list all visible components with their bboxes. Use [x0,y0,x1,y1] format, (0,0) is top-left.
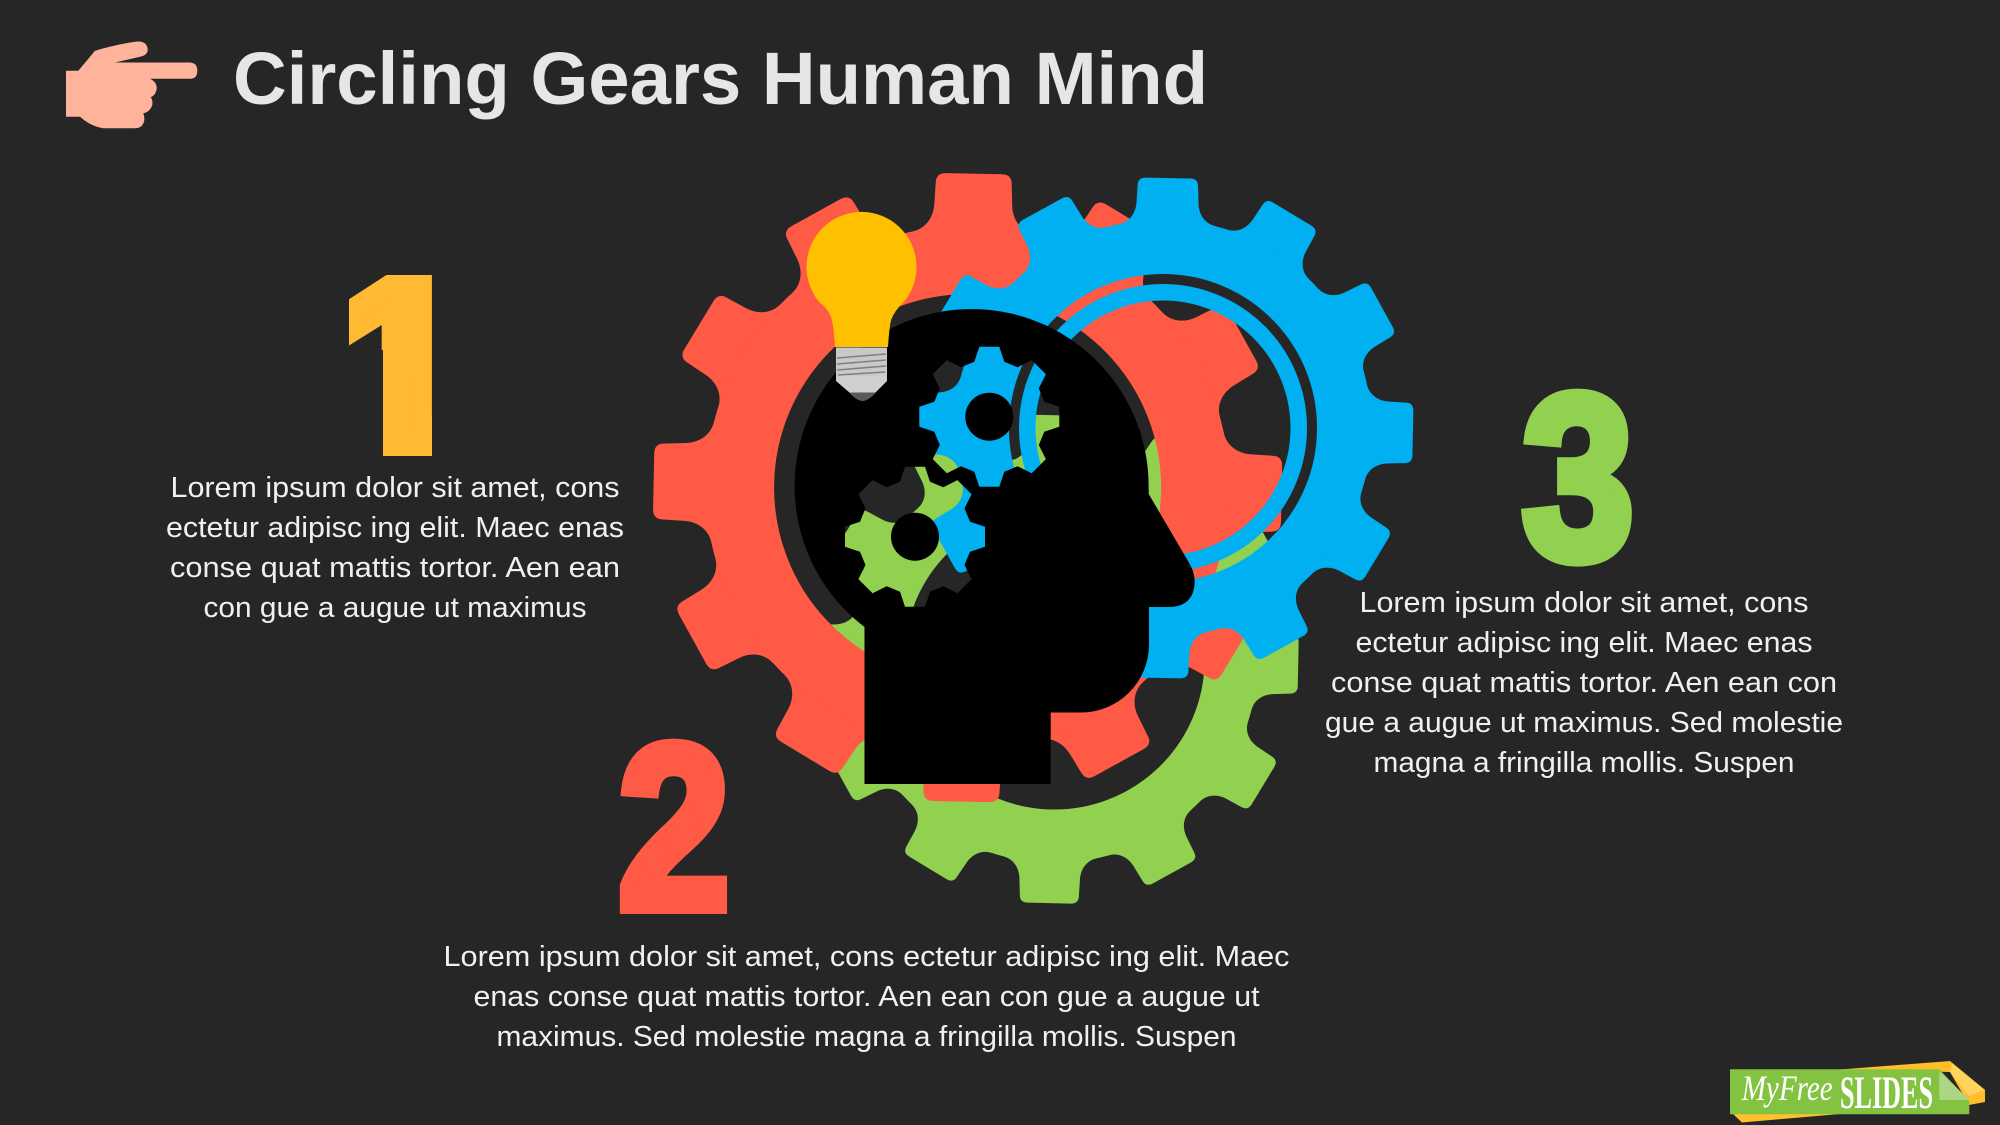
red gear [647,167,1288,808]
text block 1: con gue a augue ut maximus [204,592,586,624]
text block 3: Lorem ipsum dolor sit amet, cons [1360,587,1808,619]
text block 1: Lorem ipsum dolor sit amet, cons [170,472,620,504]
central gears and head illustration [647,167,1418,908]
text block 2: enas conse quat mattis tortor. Aen ean con gue a augue ut [474,981,1260,1013]
title: Circling Gears Human Mind [233,37,1208,120]
text block 2: maximus. Sed molestie magna a fringilla mollis. Suspen [496,1021,1236,1053]
icon: light bulb [806,212,916,401]
text block 3: gue a augue ut maximus. Sed molestie [1325,707,1843,739]
icon: pointing hand [66,41,197,128]
number 1: 1 [334,230,468,500]
logo: MyFree Slides [1730,1061,1985,1122]
head silhouette with gear cutouts [795,309,1195,784]
green gear [805,410,1303,908]
text block 2: Lorem ipsum dolor sit amet, cons ectetur adipisc ing elit. Maec [444,941,1290,973]
logo: MyFree Slides: MyFree [1741,1068,1833,1108]
text block 2 [444,941,1290,1053]
text block 3 [1325,587,1843,779]
text block 1 [166,472,624,624]
blue gear [908,173,1418,683]
text block 1: ectetur adipisc ing elit. Maec enas [166,512,624,544]
number 2: 2 [618,697,730,958]
text block 1: conse quat mattis tortor. Aen ean [170,552,620,584]
blue gear inner ring [1027,292,1299,564]
text block 3: magna a fringilla mollis. Suspen [1374,747,1794,779]
number 3: 3 [1522,347,1634,608]
text block 3: conse quat mattis tortor. Aen ean con [1331,667,1837,699]
text block 3: ectetur adipisc ing elit. Maec enas [1356,627,1812,659]
